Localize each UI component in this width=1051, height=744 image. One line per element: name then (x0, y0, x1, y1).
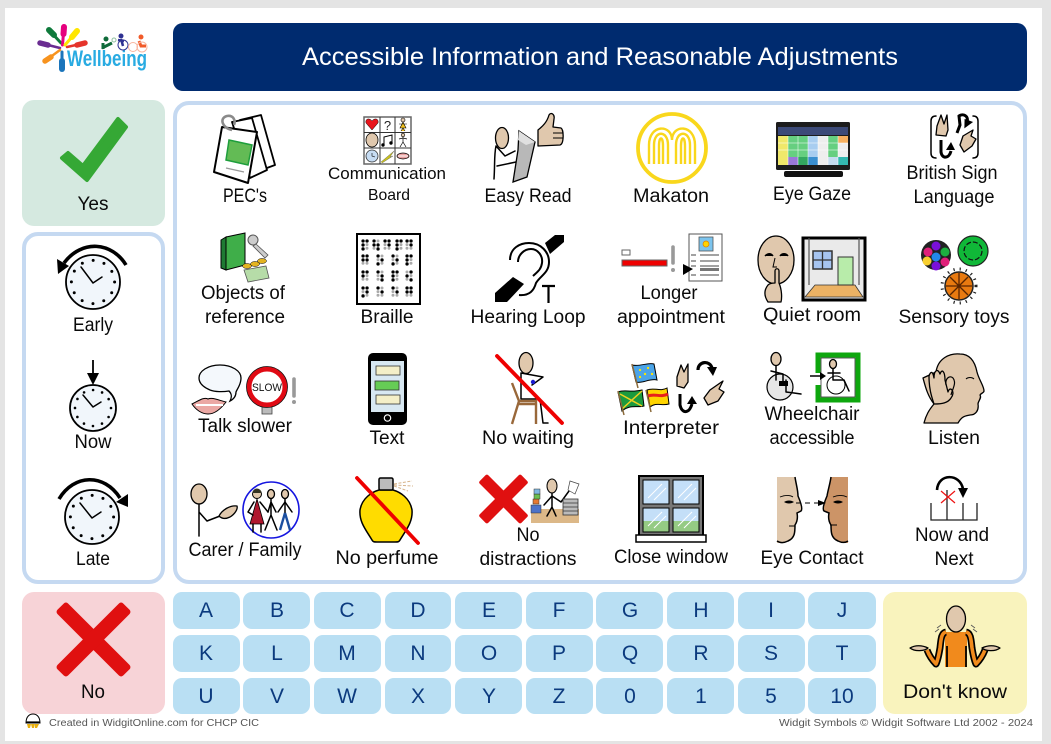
icon: signing hands (931, 115, 978, 158)
footer: created in credit: Created in WidgitOnline.com for CHCP CIC (49, 717, 259, 729)
label: British Sign (906, 163, 998, 184)
icon: hearing loop ear (495, 235, 564, 303)
alphabet and number keys: G (622, 599, 638, 622)
label: Now: Now (74, 432, 112, 453)
cell: Easy Read (484, 114, 572, 207)
icon: speech, mouth and slow sign: SLOW (252, 382, 283, 394)
icon: flags and signing hands (618, 363, 724, 415)
cell: PEC's (214, 115, 275, 207)
label: Makaton (633, 186, 709, 207)
icon: braille page (357, 234, 420, 304)
label: Don't know: Don't know (903, 682, 1007, 703)
icon: seated person crossed out (497, 352, 562, 424)
icon: long bar, exclamation and schedule (622, 234, 722, 281)
cell: Carer / Family (188, 482, 302, 561)
icon: smartphone (368, 353, 407, 425)
panel: No (22, 592, 165, 714)
icon: closed window (636, 476, 706, 542)
cell: Eye Gaze (773, 122, 851, 205)
panel: timing (24, 234, 163, 582)
alphabet and number keys: K (199, 642, 213, 665)
cell: Listen (923, 354, 984, 449)
label: Interpreter (623, 418, 720, 439)
cell: Hearing Loop (470, 235, 586, 328)
icon: green tick (62, 119, 126, 180)
alphabet and number keys: T (836, 642, 849, 665)
alphabet and number keys: N (410, 642, 426, 665)
alphabet and number keys: X (411, 685, 425, 708)
alphabet and number keys: J (837, 599, 847, 622)
cell: Makaton (633, 114, 709, 207)
label: PEC's (223, 186, 267, 207)
label: Carer / Family (188, 540, 302, 561)
label: Easy Read (484, 186, 572, 207)
clock: Now (70, 360, 116, 453)
label: Quiet room (763, 305, 861, 326)
icon: now and next chart (931, 477, 977, 520)
label: Hearing Loop (470, 307, 586, 328)
label: No perfume (336, 548, 438, 569)
icon: eye gaze screen (776, 122, 850, 177)
alphabet and number keys: 1 (695, 685, 707, 708)
cell: Talk slower (192, 365, 296, 437)
icon: book, key and money (221, 233, 269, 282)
label: Listen (928, 428, 980, 449)
label: No (516, 525, 540, 546)
cell: Communication Board (328, 117, 446, 204)
logo: Wellbeing: Wellbeing (67, 46, 147, 71)
icon: shrugging person (910, 606, 1000, 667)
alphabet and number keys: U (198, 685, 214, 708)
label: Now and (915, 525, 989, 546)
cell: Braille (357, 234, 420, 328)
label: Board (368, 187, 410, 204)
cell: Eye Contact (760, 477, 864, 569)
label: Sensory toys (898, 307, 1010, 328)
label: Next (934, 549, 974, 570)
alphabet and number keys: P (552, 642, 566, 665)
label: Communication (328, 164, 446, 183)
alphabet and number keys: Z (553, 685, 566, 708)
icon: carer and family circle (191, 482, 299, 538)
alphabet and number keys: Q (622, 642, 638, 665)
label: Language (914, 187, 994, 208)
cell: No distractions (478, 474, 579, 570)
clock: Late (59, 480, 128, 570)
cell: Now and Next (915, 477, 989, 570)
panel: Yes (22, 100, 165, 226)
alphabet and number keys: 0 (624, 685, 636, 708)
label: reference (205, 307, 285, 328)
label: Objects of (201, 283, 286, 304)
label: Eye Contact (760, 548, 864, 569)
alphabet and number keys: Y (482, 685, 496, 708)
clock: Early (57, 246, 126, 336)
cell: Quiet room (758, 236, 865, 326)
label: No: No (81, 682, 105, 703)
icon: shushing face and room (758, 236, 865, 302)
label: No waiting (482, 428, 574, 449)
alphabet and number keys: M (338, 642, 356, 665)
alphabet and number keys: V (270, 685, 284, 708)
label: distractions (480, 549, 576, 570)
cell: Interpreter (618, 363, 724, 439)
label: appointment (617, 307, 726, 328)
label: Wheelchair (764, 404, 860, 425)
alphabet and number keys: S (764, 642, 778, 665)
alphabet and number keys: C (339, 599, 355, 622)
title banner (173, 23, 1027, 91)
label: Longer (640, 283, 698, 304)
icon: picture cards (214, 115, 275, 183)
alphabet and number keys: E (482, 599, 496, 622)
cell: Close window (614, 476, 728, 568)
icon: communication board: ? (384, 118, 391, 133)
alphabet and number keys: L (271, 642, 283, 665)
alphabet and number keys (173, 592, 876, 714)
icon: wheelchair user and access sign (767, 352, 858, 400)
alphabet and number keys: 5 (765, 685, 777, 708)
cell: Wheelchair accessible (764, 352, 860, 449)
label: accessible (770, 428, 854, 449)
alphabet and number keys: D (410, 599, 426, 622)
title banner: Accessible Information and Reasonable Adjustments (302, 43, 898, 71)
cell: Longer appointment (617, 234, 726, 328)
alphabet and number keys: F (553, 599, 565, 622)
label: Text (370, 428, 405, 449)
label: Talk slower (198, 416, 293, 437)
label: Early: Early (73, 315, 113, 336)
cell: No perfume (336, 478, 438, 569)
label: Braille (360, 307, 414, 328)
icon: two faces looking at each other (777, 477, 848, 543)
icon: red cross (55, 601, 132, 678)
alphabet and number keys: B (270, 599, 284, 622)
icon: red cross and busy desk (478, 474, 579, 524)
logo: Wellbeing (40, 27, 147, 71)
alphabet and number keys: A (199, 599, 213, 622)
icon: Makaton logo (638, 114, 706, 182)
cell: No waiting (482, 352, 574, 449)
alphabet and number keys: H (693, 599, 709, 622)
panel: symbol grid (175, 103, 1025, 582)
panel: Don't know (883, 592, 1027, 714)
label: Eye Gaze (773, 184, 851, 205)
label: Close window (614, 547, 728, 568)
alphabet and number keys: 10 (830, 685, 854, 708)
cell: Objects of reference (201, 233, 286, 328)
alphabet and number keys: W (337, 685, 357, 708)
alphabet and number keys: R (693, 642, 709, 665)
alphabet and number keys: O (481, 642, 497, 665)
cell: British Sign Language (906, 115, 998, 208)
icon: head with hand to ear (923, 354, 984, 423)
footer: symbols copyright: Widgit Symbols © Widgit Software Ltd 2002 - 2024 (779, 717, 1033, 729)
footer: created in credit (26, 714, 259, 729)
label: Late: Late (76, 549, 110, 570)
alphabet and number keys: I (768, 599, 774, 622)
cell: Text (368, 353, 407, 449)
label: Yes: Yes (78, 194, 108, 215)
icon: sensory balls (921, 236, 988, 303)
icon: perfume bottle crossed out (357, 478, 418, 543)
cell: Sensory toys (898, 236, 1010, 328)
icon: person reading with thumbs up (494, 114, 563, 182)
